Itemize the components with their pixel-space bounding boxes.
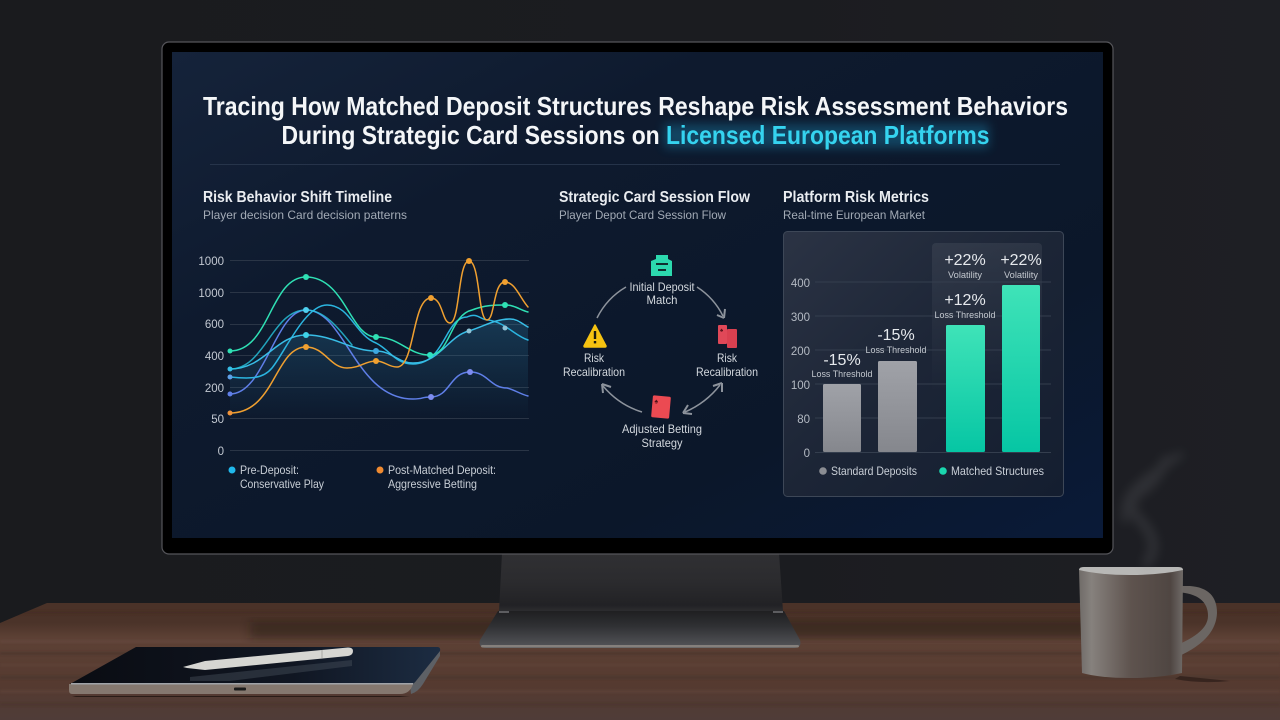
series: teal bbox=[230, 277, 528, 355]
step: risk recalibration right: Risk bbox=[717, 351, 738, 365]
bar labels: Volatility bbox=[948, 270, 982, 281]
bar chart card: 300 bbox=[791, 312, 810, 324]
series: blue bbox=[230, 310, 528, 399]
icon: warning bbox=[584, 325, 606, 347]
bar chart card: 200 bbox=[791, 346, 810, 358]
heading bbox=[559, 189, 750, 222]
steam bbox=[1124, 455, 1180, 563]
monitor bbox=[162, 42, 1113, 554]
line chart: 400 bbox=[205, 351, 224, 363]
heading: Player decision Card decision patterns bbox=[203, 208, 407, 222]
title bbox=[203, 91, 1068, 150]
legend: Aggressive Betting bbox=[388, 477, 477, 491]
step: risk recalibration left: Risk bbox=[584, 351, 605, 365]
screen bbox=[172, 52, 1103, 538]
bar labels: +22% bbox=[1000, 252, 1042, 269]
step: initial deposit match: Match bbox=[646, 293, 678, 307]
step: initial deposit match: Initial Deposit bbox=[630, 280, 695, 294]
heading: Real-time European Market bbox=[783, 208, 926, 222]
heading bbox=[203, 189, 407, 222]
bar labels: Loss Threshold bbox=[866, 345, 926, 356]
step: risk recalibration left: Recalibration bbox=[563, 365, 625, 379]
title: Tracing How Matched Deposit Structures Reshape Risk Assessment Behaviors bbox=[203, 91, 1068, 121]
bar labels: -15% bbox=[823, 352, 861, 369]
icon: deposit bbox=[651, 255, 672, 276]
heading: Strategic Card Session Flow bbox=[559, 189, 750, 206]
icon: cards: ♠ bbox=[720, 328, 724, 334]
bar labels: Loss Threshold bbox=[934, 310, 996, 321]
legend: Post-Matched Deposit: bbox=[388, 463, 496, 477]
step: adjusted betting strategy: Strategy bbox=[642, 436, 682, 450]
line chart: 1000 bbox=[198, 256, 224, 268]
bar chart card: 100 bbox=[791, 380, 810, 392]
heading bbox=[783, 189, 929, 222]
step: risk recalibration left bbox=[563, 325, 625, 379]
line chart: 600 bbox=[205, 319, 224, 331]
series: orange bbox=[230, 261, 528, 413]
bar chart card bbox=[784, 232, 1064, 496]
bar chart card: 80 bbox=[797, 414, 810, 426]
bar labels: Loss Threshold bbox=[812, 369, 872, 380]
tablet bbox=[69, 647, 440, 697]
line chart: 1000 bbox=[198, 288, 224, 300]
data points bbox=[228, 258, 508, 416]
legend: Conservative Play bbox=[240, 477, 324, 491]
legend: Pre-Deposit: bbox=[240, 463, 299, 477]
line chart: 0 bbox=[218, 446, 224, 458]
step: risk recalibration right bbox=[696, 325, 758, 379]
coffee mug bbox=[1079, 567, 1230, 682]
series: cyan peak bbox=[230, 305, 528, 378]
panel: risk behavior shift timeline bbox=[198, 189, 529, 491]
legend: Standard Deposits bbox=[831, 464, 917, 478]
stylus bbox=[183, 648, 353, 670]
cycle arrows bbox=[597, 287, 725, 414]
series: second cyan bbox=[230, 310, 352, 369]
bar labels: -15% bbox=[877, 327, 915, 344]
step: adjusted betting strategy: Adjusted Betting bbox=[622, 422, 702, 436]
series: light blue bbox=[230, 319, 528, 369]
legend: Matched Structures bbox=[951, 464, 1044, 478]
bar labels: +22% bbox=[944, 252, 986, 269]
bar labels bbox=[812, 252, 1042, 380]
line chart: 200 bbox=[205, 383, 224, 395]
bars: matched structures bbox=[946, 285, 1040, 452]
legend bbox=[819, 464, 1044, 478]
heading: Platform Risk Metrics bbox=[783, 189, 929, 206]
step: risk recalibration right: Recalibration bbox=[696, 365, 758, 379]
panel: platform risk metrics bbox=[783, 189, 1064, 496]
heading: Player Depot Card Session Flow bbox=[559, 208, 726, 222]
line chart bbox=[198, 256, 529, 458]
monitor stand bbox=[480, 553, 800, 648]
bar labels: Volatility bbox=[1004, 270, 1038, 281]
icon: red card: ♠ bbox=[654, 398, 659, 406]
title: During Strategic Card Sessions on Licensed European Platforms bbox=[282, 120, 990, 150]
legend bbox=[228, 463, 496, 491]
bar chart card: 400 bbox=[791, 278, 810, 290]
line chart: 50 bbox=[211, 414, 224, 426]
heading: Risk Behavior Shift Timeline bbox=[203, 189, 392, 206]
step: adjusted betting strategy bbox=[622, 395, 702, 450]
panel: strategic card session flow bbox=[559, 189, 758, 450]
bars: standard deposits bbox=[823, 361, 917, 452]
wooden desk bbox=[0, 603, 1280, 720]
bar labels: +12% bbox=[944, 292, 986, 309]
step: initial deposit match bbox=[630, 255, 695, 307]
bar chart card: 0 bbox=[804, 448, 810, 460]
